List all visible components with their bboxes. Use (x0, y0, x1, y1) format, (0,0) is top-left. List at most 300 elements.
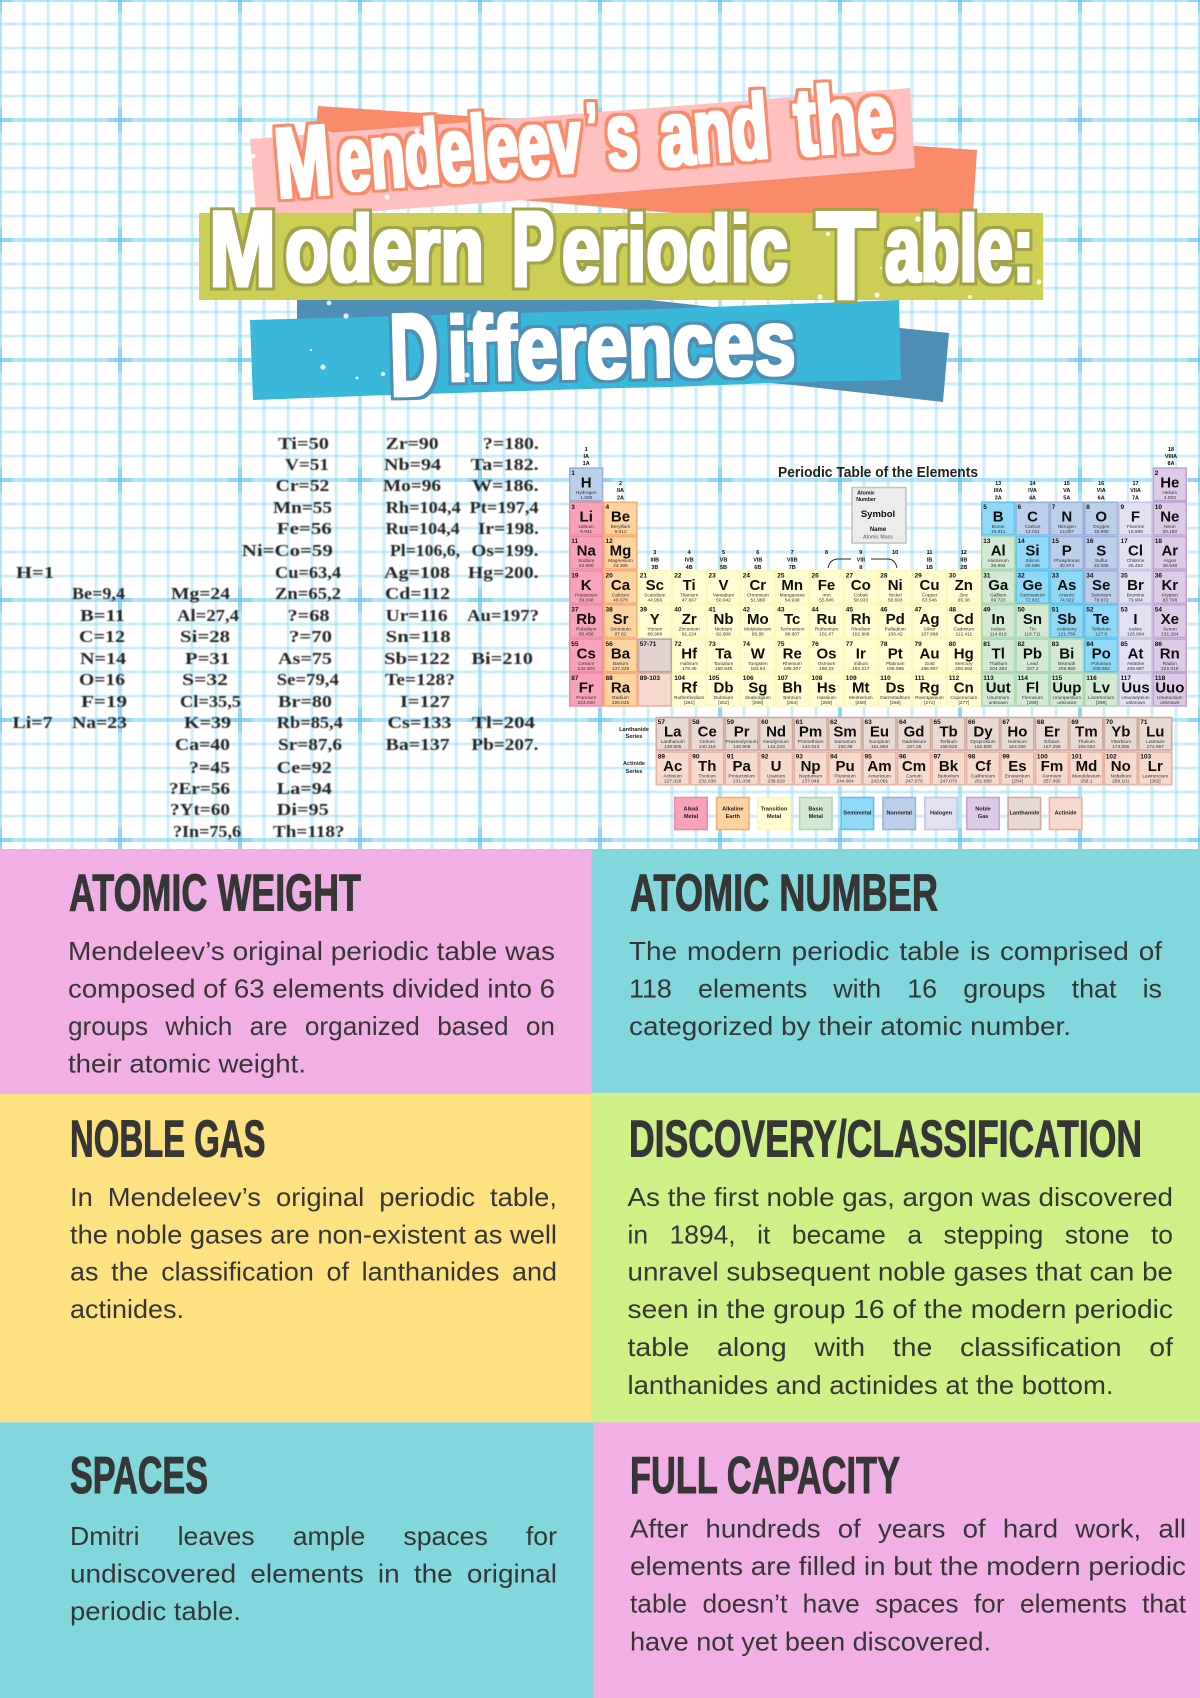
lanthanide series: Erbium (1044, 739, 1060, 745)
elements grid: Niobium (715, 627, 732, 633)
elements grid: 178.49 (682, 666, 697, 672)
elements grid: Fl (1026, 680, 1039, 696)
column: Zr to Ba: I=127 (400, 692, 451, 711)
column: Ti to Th: Zn=65,2 (275, 584, 341, 603)
elements grid: Zn (955, 577, 973, 594)
lanthanide series: 68 (1037, 719, 1045, 726)
title line: Modern Periodic Table:: eriodic (562, 196, 788, 301)
elements grid: Kr (1161, 577, 1178, 594)
text: full capacity body (630, 1514, 1187, 1657)
elements grid: 114.818 (990, 632, 1007, 638)
elements grid: Nickel (889, 592, 902, 598)
actinide series: Curium (906, 774, 922, 780)
group labels: 13 (995, 481, 1001, 487)
elements grid: Meitnerium (849, 695, 873, 701)
elements grid: Cd (954, 611, 974, 628)
lanthanide series: 67 (1002, 719, 1010, 726)
elements grid: 1 (571, 470, 575, 477)
elements grid: 65.38 (958, 598, 970, 604)
lanthanide series: Series (626, 734, 642, 740)
elements grid: Uup (1052, 680, 1081, 696)
lanthanide series: Ce (698, 724, 717, 741)
elements grid: 48 (949, 607, 956, 614)
group labels: 1A (583, 461, 590, 467)
elements grid: 208.982 (1093, 666, 1110, 672)
lanthanide series: 64 (899, 719, 907, 726)
elements grid: As (1057, 577, 1076, 594)
title banner: olive (199, 213, 1043, 300)
lanthanide series: 144.913 (802, 744, 820, 750)
title line: Mendeleev's and the: endeleev (334, 90, 585, 211)
elements grid: 28 (880, 572, 888, 580)
elements grid: Zirconium (679, 627, 700, 633)
elements grid: Mt (852, 680, 870, 696)
elements grid: Oxygen (1093, 524, 1110, 530)
group labels: 7B (789, 565, 796, 571)
elements grid: Technetium (780, 627, 804, 633)
elements grid: Iodine (1129, 627, 1142, 633)
lanthanide series: 173.055 (1112, 744, 1130, 750)
elements grid: Bismuth (1058, 661, 1076, 667)
lanthanide series: Lanthanum (661, 739, 685, 745)
elements grid: Tl (992, 645, 1005, 662)
elements grid: 13 (983, 538, 991, 545)
column: Zr to Ba (383, 434, 461, 754)
elements grid: 63.546 (922, 598, 937, 604)
elements grid: Cu (920, 577, 940, 594)
elements grid: Ti (683, 577, 696, 594)
lanthanide series: 150.36 (838, 744, 853, 750)
elements grid: 118 (1155, 675, 1166, 682)
elements grid: 38 (606, 607, 613, 614)
elements grid: F (1131, 508, 1140, 526)
actinide series: Cf (975, 758, 992, 775)
actinide series: Th (698, 758, 716, 775)
group labels: VB (720, 558, 727, 564)
elements grid: Copernicium (950, 695, 977, 701)
actinide series: Uranium (767, 774, 785, 780)
column: Zr to Ba: Pl=106,6, (390, 541, 460, 560)
group labels: 15 (1064, 481, 1070, 487)
column: Ta to Pb: Hg=200. (468, 563, 539, 582)
column: Mg to In (169, 584, 241, 841)
heading: full capacity: FULL CAPACITY (630, 1447, 900, 1505)
column: Ta to Pb: Bi=210 (471, 649, 533, 668)
elements grid: Na (577, 543, 596, 560)
elements grid: 9 (1120, 504, 1124, 511)
background: graph paper grid (0, 0, 1200, 849)
elements grid: unknown (1126, 700, 1145, 706)
actinide series: 102 (1106, 754, 1117, 761)
column: Ta to Pb: ?=180. (483, 434, 539, 453)
elements grid: 116 (1086, 675, 1097, 682)
column: Be to Na: O=16 (79, 670, 125, 689)
elements grid: P (1062, 543, 1072, 560)
text: discovery body: As the first noble gas, argon was discovered (628, 1182, 1173, 1212)
title line: Modern Periodic Table:: M (209, 188, 276, 309)
elements grid: Antimony (1057, 627, 1077, 633)
panel: noble gas (0, 1094, 591, 1422)
elements grid: 50 (1018, 607, 1025, 614)
elements grid (570, 468, 1186, 706)
elements grid: Astatine (1127, 661, 1144, 667)
lanthanide series: 158.925 (940, 744, 957, 750)
elements grid: Aluminum (988, 558, 1009, 564)
actinide series: 244.064 (836, 779, 854, 785)
elements grid: 127.6 (1095, 632, 1108, 638)
column: Ti to Th: Cr=52 (276, 476, 329, 495)
elements grid: 30 (949, 572, 956, 580)
actinide series: Bk (939, 758, 959, 775)
text: noble gas body: actinides. (70, 1294, 184, 1324)
elements grid: 223.020 (578, 700, 595, 706)
column: period 1-2 starters: Li=7 (12, 713, 53, 732)
elements grid: 47 (914, 607, 922, 614)
actinide series: Fm (1041, 758, 1063, 775)
heading: spaces: SPACES (70, 1447, 208, 1505)
elements grid: Sulfur (1095, 558, 1108, 564)
legend: Alkali (684, 807, 699, 813)
elements grid: 54.938 (785, 598, 800, 604)
elements grid: 29 (914, 572, 922, 580)
text: full capacity body: have not yet been discovered. (630, 1627, 991, 1657)
elements grid: Lead (1027, 661, 1038, 667)
title line: Differences: D (388, 289, 440, 422)
elements grid: 15.999 (1094, 529, 1109, 535)
Mendeleev's original periodic table (12, 434, 539, 841)
group labels: 2 (619, 481, 622, 487)
group labels: VIII (857, 558, 865, 564)
actinide series: 89 (658, 754, 665, 761)
elements grid: unknown (1160, 700, 1180, 706)
elements grid: Radium (612, 695, 629, 701)
elements grid: Bh (782, 680, 802, 696)
group labels: IVB (685, 558, 694, 564)
elements grid: 72.631 (1025, 598, 1040, 604)
column: Ta to Pb: Au=197? (467, 606, 539, 625)
column: Mg to In: Al=27,4 (177, 606, 240, 625)
lanthanide series (619, 718, 1172, 750)
elements grid: Be (611, 508, 630, 526)
lanthanide series: La (664, 724, 682, 741)
group labels: 14 (1029, 481, 1036, 487)
actinide series: 98 (968, 754, 976, 761)
text: atomic number body: 118 elements with 16 groups that is (629, 974, 1162, 1004)
text: discovery body: table along with the classification of (628, 1332, 1174, 1362)
elements grid: 35.453 (1128, 563, 1143, 569)
text: discovery body: seen in the group 16 of the modern periodic (628, 1294, 1173, 1324)
actinide series: 96 (899, 754, 907, 761)
column: Zr to Ba: Rh=104,4 (386, 498, 461, 517)
actinide series: Neptunium (799, 774, 822, 780)
actinide series: 93 (796, 754, 803, 761)
lanthanide series: 140.908 (733, 744, 751, 750)
elements grid: 21 (640, 572, 647, 580)
elements grid: Ununoctium (1157, 695, 1183, 701)
elements grid: [268] (855, 700, 866, 706)
column: Mg to In: K=39 (184, 713, 231, 732)
elements grid: 5 (983, 504, 987, 511)
elements grid: 8 (1086, 504, 1090, 511)
legend: Metal (767, 814, 782, 820)
elements grid: 77 (846, 641, 853, 648)
elements grid: 102.906 (852, 632, 870, 638)
lanthanide series: Lu (1146, 724, 1164, 741)
group labels: 5A (1063, 496, 1070, 502)
text: atomic weight body: their atomic weight. (68, 1049, 306, 1079)
lanthanide series: Tb (939, 724, 958, 741)
actinide series: Series (626, 769, 642, 775)
lanthanide series: 63 (864, 719, 872, 726)
group labels: 6A (1098, 496, 1105, 502)
elements grid: 204.383 (990, 666, 1007, 672)
text: discovery body: lanthanides and actinides at the bottom. (628, 1370, 1114, 1400)
elements grid: Mn (781, 577, 803, 594)
group labels: IVA (1028, 488, 1037, 494)
elements grid: Calcium (612, 592, 629, 598)
column: Ti to Th: Ti=50 (278, 434, 329, 453)
elements grid: 137.328 (612, 666, 629, 672)
actinide series: 259.101 (1112, 779, 1130, 785)
group labels: 11 (927, 550, 932, 556)
actinide series: [262] (1150, 779, 1161, 785)
text: spaces body: periodic table. (70, 1596, 241, 1626)
lanthanide series: Dysprosium (970, 739, 996, 745)
elements grid: 15 (1052, 538, 1059, 545)
column: period 1-2 starters (12, 563, 54, 732)
elements grid: Hg (954, 645, 974, 662)
elements grid: [264] (787, 700, 798, 706)
elements grid: 83 (1052, 641, 1059, 648)
elements grid: 18.998 (1128, 529, 1143, 535)
lanthanide series: 144.243 (767, 744, 785, 750)
actinide series: 243.061 (871, 779, 888, 785)
group labels: 2A (617, 496, 624, 502)
elements grid: [298] (1096, 700, 1107, 706)
elements grid: 106.42 (888, 632, 903, 638)
elements grid: 3 (571, 504, 575, 511)
legend: Noble (975, 807, 991, 813)
column: Mg to In: ?In=75,6 (173, 822, 241, 841)
column: Be to Na: B=11 (80, 606, 125, 625)
elements grid: Rn (1160, 645, 1180, 662)
actinide series: U (771, 758, 782, 775)
elements grid: 207.2 (1026, 666, 1039, 672)
elements grid: Rb (576, 611, 596, 628)
text: full capacity body: table doesn’t have spaces for elements that (630, 1589, 1187, 1619)
elements grid: 81 (983, 641, 991, 648)
elements grid: 83.798 (1162, 598, 1177, 604)
column: Ti to Th: La=94 (277, 779, 332, 798)
elements grid: Li (580, 508, 593, 526)
elements grid: 20.180 (1162, 529, 1177, 535)
elements grid: Rg (920, 680, 940, 696)
column: Mg to In: Ca=40 (175, 735, 230, 754)
elements grid: Ununtrium (987, 695, 1009, 701)
elements grid: 72 (674, 641, 682, 648)
elements grid: Ar (1161, 543, 1178, 560)
elements grid: Ga (988, 577, 1009, 594)
lanthanide series: 58 (692, 719, 700, 726)
column: Ti to Th: Sr=87,6 (278, 735, 342, 754)
elements grid: 82 (1018, 641, 1025, 648)
elements grid: 41 (708, 607, 716, 614)
actinide series: Einsteinium (1005, 774, 1030, 780)
actinide series: Cm (902, 758, 926, 775)
elements grid: [262] (718, 700, 729, 706)
column: Ti to Th: ?=70 (289, 627, 332, 646)
elements grid: 69.723 (991, 598, 1006, 604)
actinide series: 257.095 (1043, 779, 1061, 785)
elements grid: Rf (681, 680, 698, 696)
elements grid: Darmstadtium (880, 695, 910, 701)
elements grid: 88.906 (647, 632, 662, 638)
actinide series: 101 (1071, 754, 1083, 761)
panel: full capacity (594, 1422, 1200, 1698)
key cell (852, 488, 906, 543)
elements grid: Barium (613, 661, 628, 667)
group labels: 1 (585, 447, 588, 453)
lanthanide series: Pr (734, 724, 750, 741)
elements grid: Ds (886, 680, 905, 696)
column: Be to Na (72, 584, 127, 732)
actinide series: [254] (1012, 779, 1023, 785)
column: Ti to Th: Ce=92 (277, 758, 332, 777)
elements grid: 190.23 (819, 666, 834, 672)
panel: discovery/classification (591, 1093, 1200, 1422)
title line: Modern Periodic Table:: T (816, 187, 876, 326)
elements grid: Beryllium (611, 524, 630, 530)
elements grid: 109 (846, 675, 857, 682)
column: Ti to Th: Cu=63,4 (275, 563, 342, 582)
elements grid: 39 (640, 607, 647, 614)
elements grid: Manganese (780, 592, 805, 598)
lanthanide series: 138.905 (664, 744, 682, 750)
elements grid: 28.086 (1025, 563, 1040, 569)
actinide series: 247.070 (940, 779, 957, 785)
actinide series: Californium (971, 774, 995, 780)
elements grid: Db (714, 680, 734, 696)
group labels: 3A (995, 496, 1002, 502)
lanthanide series: 60 (761, 719, 769, 726)
elements grid: Gold (924, 661, 935, 667)
column: Mg to In: S=32 (182, 670, 228, 689)
actinide series: Pu (836, 758, 855, 775)
elements grid: 98.907 (785, 632, 800, 638)
elements grid: Rutherfordium (674, 695, 704, 701)
title line: Mendeleev's and the: ’ (584, 89, 600, 162)
elements grid: [261] (684, 700, 695, 706)
text: atomic number body: The modern periodic table is comprised of (629, 936, 1163, 966)
title line: Mendeleev's and the: M (271, 104, 335, 220)
elements grid: O (1095, 508, 1107, 526)
lanthanide series: 62 (830, 719, 838, 726)
elements grid: Xe (1161, 611, 1179, 628)
elements grid: 17 (1120, 538, 1128, 545)
group labels: 2B (960, 565, 967, 571)
lanthanide series: Samarium (834, 739, 856, 745)
elements grid: 1.008 (580, 495, 593, 501)
elements grid: Sodium (578, 558, 594, 564)
elements grid: Magnesium (608, 558, 633, 564)
elements grid: Y (650, 611, 660, 628)
group labels: 5B (720, 565, 727, 571)
elements grid: Cs (577, 645, 596, 662)
elements grid: Co (851, 577, 871, 594)
lanthanide series: 164.930 (1009, 744, 1026, 750)
elements grid: Au (920, 645, 940, 662)
elements grid: Sr (613, 611, 629, 628)
group labels: 8 (859, 565, 862, 571)
column: Zr to Ba: Sn=118 (386, 627, 451, 646)
elements grid: Mercury (955, 661, 973, 667)
elements grid: 108 (812, 675, 823, 682)
elements grid: 107 (777, 675, 788, 682)
column: Zr to Ba: Ag=108 (384, 563, 450, 582)
elements grid: Scandium (644, 592, 665, 598)
text: noble gas body: In Mendeleev’s original periodic table, (70, 1182, 557, 1212)
column: Ta to Pb: Pb=207. (471, 735, 538, 754)
group labels: VA (1063, 488, 1070, 494)
elements grid: 26 (812, 572, 819, 580)
group labels: IIA (617, 488, 624, 494)
group labels: 5 (722, 550, 725, 556)
elements grid: 10.811 (991, 529, 1006, 535)
elements grid: Sn (1023, 611, 1042, 628)
column: Ti to Th: Ni=Co=59 (242, 541, 333, 560)
elements grid: Si (1025, 543, 1040, 560)
elements grid: Dubnium (714, 695, 733, 701)
elements grid: Ge (1022, 577, 1043, 594)
lanthanide series: Lanthanide (619, 727, 649, 733)
elements grid: 75 (777, 641, 785, 648)
elements grid: 54 (1155, 607, 1162, 614)
heading: atomic weight: ATOMIC WEIGHT (69, 865, 361, 923)
actinide series: Ac (663, 758, 682, 775)
panel: spaces (0, 1422, 594, 1698)
elements grid: Hf (681, 645, 698, 662)
elements grid: Xenon (1163, 627, 1177, 633)
elements grid: Indium (991, 627, 1005, 633)
lanthanide series: Ho (1007, 724, 1027, 741)
elements grid: Ne (1160, 508, 1179, 526)
elements grid: [269] (890, 700, 901, 706)
group labels: IIB (960, 558, 967, 564)
text: noble gas body: as the classification of lanthanides and (70, 1257, 557, 1287)
elements grid: 117 (1120, 675, 1131, 682)
elements grid: Fr (579, 680, 594, 696)
elements grid: H (581, 474, 592, 491)
elements grid: 39.948 (1162, 563, 1177, 569)
actinide series: Am (867, 758, 892, 775)
heading: noble gas: NOBLE GAS (70, 1111, 266, 1169)
elements grid: 12 (606, 538, 613, 545)
elements grid: 10 (1155, 504, 1162, 511)
elements grid: 43 (777, 607, 785, 614)
column: Mg to In: Cl=35,5 (180, 692, 241, 711)
decorative speckles (250, 128, 1042, 380)
elements grid: 27 (846, 572, 853, 580)
elements grid: Uut (986, 680, 1011, 696)
title line: Modern Periodic Table: (209, 187, 1034, 326)
elements grid: Yttrium (647, 627, 662, 633)
elements grid: Ir (856, 645, 866, 662)
text: atomic weight body: composed of 63 elements divided into 6 (68, 974, 555, 1004)
elements grid: 56 (606, 641, 613, 648)
elements grid: Ta (715, 645, 732, 662)
elements grid: Tc (784, 611, 800, 628)
elements grid: Hassium (817, 695, 836, 701)
